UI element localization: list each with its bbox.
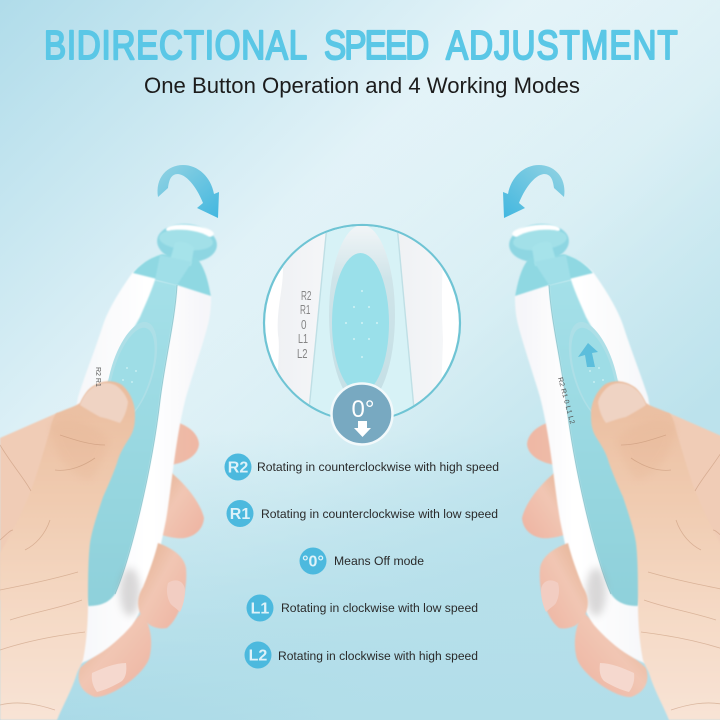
mode row: L2 bbox=[244, 642, 478, 668]
badge: 0 degrees: 0° bbox=[352, 396, 374, 423]
arrow: counterclockwise rotation bbox=[503, 165, 564, 218]
arrow: clockwise rotation bbox=[158, 165, 219, 218]
mode row: R2: R2 bbox=[228, 460, 248, 476]
title: SPEED bbox=[324, 22, 429, 68]
title bbox=[44, 22, 678, 68]
mode row: R2 bbox=[224, 454, 499, 480]
mode row: off: Means Off mode bbox=[334, 554, 424, 568]
inset mode labels bbox=[297, 289, 312, 361]
inset button bbox=[332, 253, 389, 393]
mode row: L1: Rotating in clockwise with low speed bbox=[281, 601, 478, 615]
mode row: L2: Rotating in clockwise with high speed bbox=[278, 649, 478, 663]
left device mode labels: R2 R1 bbox=[94, 367, 101, 387]
mode row: L1: L1 bbox=[251, 600, 269, 618]
mode row: R2: Rotating in counterclockwise with high speed bbox=[257, 460, 499, 474]
inset mode labels: 0 bbox=[301, 318, 307, 332]
inset button ring bbox=[329, 225, 395, 405]
icon: up arrow on right button bbox=[578, 343, 598, 367]
title: BIDIRECTIONAL bbox=[44, 22, 307, 68]
inset mode labels: R1 bbox=[300, 303, 311, 317]
right hand holding device bbox=[507, 221, 720, 720]
inset mode labels: L1 bbox=[298, 332, 308, 346]
right device mode labels: R2 R1 0 L1 L2 bbox=[556, 377, 575, 425]
inset mode labels: L2 bbox=[297, 347, 308, 361]
inset: switch close-up bbox=[264, 225, 460, 421]
title: ADJUSTMENT bbox=[446, 22, 678, 68]
mode row: R1 bbox=[226, 500, 498, 527]
left hand holding device bbox=[0, 221, 219, 720]
mode row: R1: Rotating in counterclockwise with low speed bbox=[261, 507, 498, 521]
inset blue band bbox=[308, 225, 415, 420]
subtitle: One Button Operation and 4 Working Modes bbox=[144, 73, 580, 98]
mode row: off bbox=[300, 548, 424, 574]
mode row: off: °0° bbox=[302, 554, 324, 570]
inset mode labels: R2 bbox=[301, 289, 312, 303]
inset left body bbox=[278, 232, 326, 404]
icon: down arrow bbox=[354, 421, 371, 437]
mode row: L2: L2 bbox=[249, 648, 267, 664]
mode row: L1 bbox=[246, 594, 478, 622]
badge: 0 degrees bbox=[332, 384, 392, 444]
mode row: R1: R1 bbox=[230, 506, 250, 523]
inset right body bbox=[398, 232, 443, 405]
